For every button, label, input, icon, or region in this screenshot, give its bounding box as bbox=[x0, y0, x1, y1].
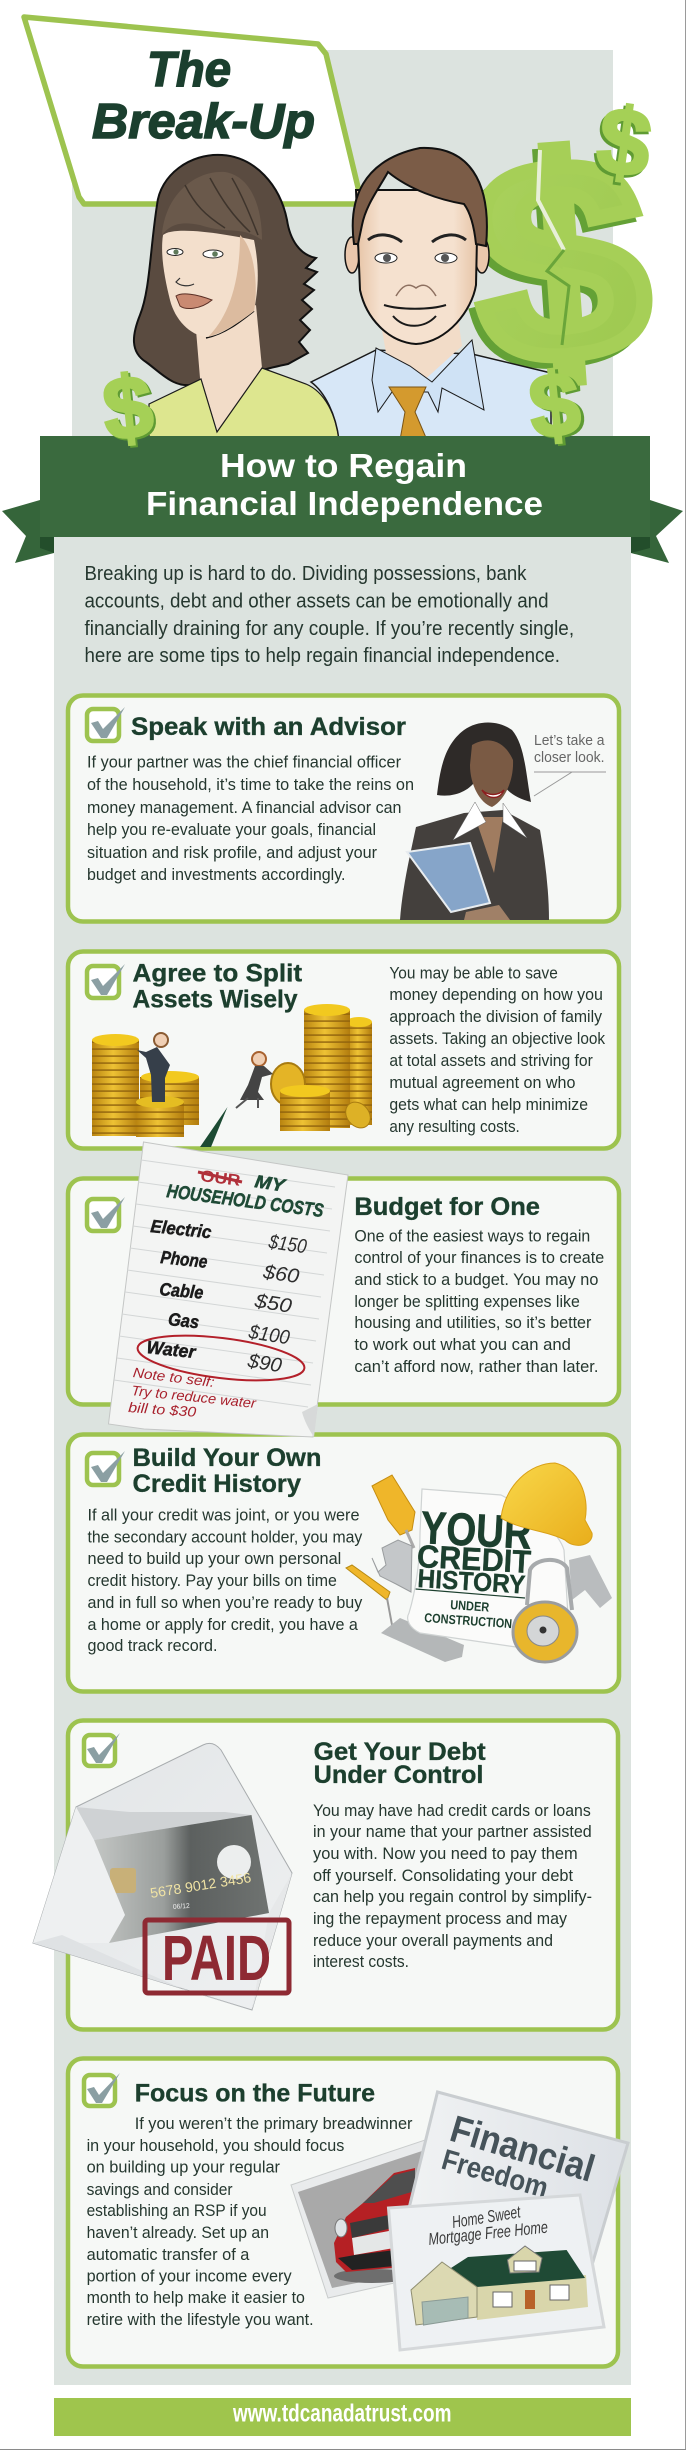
body text: savings and consider bbox=[87, 2180, 233, 2199]
body text bbox=[88, 1506, 363, 1655]
scroll text: CONSTRUCTION bbox=[424, 1610, 513, 1631]
body text: interest costs. bbox=[313, 1952, 409, 1971]
title: The Break-Up: Break-Up bbox=[92, 95, 315, 149]
ears bbox=[345, 237, 489, 273]
background panel: lower bbox=[54, 530, 631, 2385]
heading bbox=[314, 1738, 486, 1789]
body text: reduce your overall payments and bbox=[313, 1931, 553, 1950]
heading bbox=[132, 1444, 322, 1498]
icon: small dollar bottom left: $ bbox=[100, 358, 159, 461]
body text: ing the repayment process and may bbox=[313, 1909, 567, 1928]
neck and chest bbox=[196, 305, 262, 432]
icon: wrench bbox=[372, 1540, 412, 1592]
icon: hard hat bbox=[501, 1463, 592, 1545]
icon: small dollar bottom left: $ bbox=[98, 356, 157, 459]
illustration: coin stacks right with woman bbox=[236, 1004, 375, 1133]
body text: any resulting costs. bbox=[389, 1117, 520, 1136]
body text: control of your finances is to create bbox=[354, 1248, 604, 1267]
icon: checkbox bbox=[87, 1451, 125, 1485]
scroll document bbox=[408, 1489, 569, 1647]
body text: If your partner was the chief financial officer bbox=[87, 753, 401, 772]
body text: situation and risk profile, and adjust your bbox=[87, 843, 377, 862]
body text: can help you regain control by simplify- bbox=[313, 1887, 592, 1906]
body text: a home or apply for credit, you have a bbox=[88, 1615, 358, 1634]
icon: checkbox bbox=[87, 964, 125, 998]
subtitle: Financial Independence bbox=[146, 485, 543, 522]
body text: of the household, it’s time to take the reins on bbox=[87, 775, 414, 794]
icon: padlock bbox=[513, 1560, 577, 1662]
banner fold right bbox=[631, 537, 650, 553]
scroll text: HISTORY bbox=[417, 1563, 526, 1600]
bangs bbox=[162, 172, 262, 240]
note expenses: $50 bbox=[252, 1290, 293, 1318]
panel: speak with an advisor bbox=[68, 696, 619, 922]
intro text: accounts, debt and other assets can be emotionally and bbox=[84, 591, 548, 613]
body text: gets what can help minimize bbox=[389, 1095, 588, 1114]
illustration: man bbox=[311, 148, 551, 440]
illustration: mortgage free home card bbox=[388, 2195, 604, 2350]
body text: money depending on how you bbox=[389, 985, 603, 1004]
tie bbox=[389, 387, 427, 440]
heading: Build Your Own bbox=[132, 1444, 322, 1472]
face bbox=[356, 190, 478, 344]
panel: build your own credit history bbox=[68, 1434, 619, 1692]
intro text: here are some tips to help regain financial independence. bbox=[84, 645, 560, 667]
intro text bbox=[84, 563, 574, 667]
collar bbox=[372, 340, 484, 412]
body text: haven’t already. Set up an bbox=[87, 2223, 269, 2242]
body text: the secondary account holder, you may bbox=[88, 1528, 363, 1547]
illustration: woman bbox=[134, 155, 339, 440]
heading: Under Control bbox=[314, 1761, 483, 1789]
illustration: financial freedom card: Freedom bbox=[438, 2144, 552, 2205]
body text: at total assets and striving for bbox=[389, 1051, 593, 1070]
heading: Assets Wisely bbox=[132, 986, 298, 1014]
body text: money management. A financial advisor can bbox=[87, 798, 402, 817]
illustration: financial freedom card: Financial bbox=[445, 2108, 599, 2191]
scroll text: CREDIT bbox=[416, 1538, 532, 1580]
illustration: budget note paper bbox=[108, 1107, 348, 1437]
body text: If you weren’t the primary breadwinner bbox=[135, 2114, 413, 2133]
hair back bbox=[134, 155, 317, 385]
body text bbox=[87, 753, 414, 884]
icon: screwdriver bbox=[372, 1475, 415, 1548]
handwriting bbox=[427, 2202, 549, 2249]
footer bbox=[54, 2398, 631, 2436]
note heading: HOUSEHOLD COSTS bbox=[165, 1181, 325, 1222]
note heading: MY bbox=[253, 1171, 288, 1196]
note expenses bbox=[146, 1216, 308, 1377]
note heading: OUR bbox=[200, 1168, 242, 1190]
note to self bbox=[128, 1364, 258, 1420]
envelope front bbox=[33, 1807, 125, 1943]
eyes, nose and lips bbox=[167, 248, 223, 308]
scroll text: UNDER bbox=[450, 1597, 490, 1615]
heading bbox=[132, 960, 303, 1014]
callout: closer look. bbox=[534, 749, 604, 766]
banner body bbox=[40, 436, 650, 537]
icon: big cracked dollar sign: $ bbox=[466, 98, 657, 424]
body text: mutual agreement on who bbox=[389, 1073, 575, 1092]
website url: www.tdcanadatrust.com bbox=[232, 2400, 452, 2428]
panel: get your debt under control bbox=[33, 1720, 618, 2030]
body text: If all your credit was joint, or you were bbox=[88, 1506, 360, 1525]
panel: agree to split assets wisely bbox=[68, 952, 619, 1148]
body text: approach the division of family bbox=[389, 1007, 602, 1026]
icon: small dollar top right: $ bbox=[589, 89, 655, 200]
intro text: Breaking up is hard to do. Dividing possessions, bank bbox=[84, 563, 527, 585]
body text: help you re-evaluate your goals, financial bbox=[87, 820, 376, 839]
body text: retire with the lifestyle you want. bbox=[87, 2310, 314, 2329]
scroll text: YOUR bbox=[419, 1501, 533, 1559]
subtitle bbox=[146, 447, 543, 522]
body text: and in full so when you’re ready to buy bbox=[88, 1593, 363, 1612]
note expenses: $90 bbox=[245, 1350, 283, 1377]
callout bbox=[534, 732, 606, 796]
illustration: financial freedom card bbox=[400, 2092, 628, 2265]
icon: small dollar bottom right: $ bbox=[528, 355, 588, 460]
body text: longer be splitting expenses like bbox=[354, 1292, 580, 1311]
house bbox=[411, 2246, 588, 2325]
body text: establishing an RSP if you bbox=[87, 2201, 267, 2220]
blouse bbox=[149, 368, 339, 440]
handwriting: Home Sweet bbox=[451, 2202, 523, 2232]
body text bbox=[87, 2114, 413, 2329]
envelope back bbox=[33, 1743, 292, 2010]
body text: and stick to a budget. You may no bbox=[354, 1270, 598, 1289]
note expenses: $100 bbox=[246, 1321, 291, 1349]
hair bbox=[353, 148, 487, 246]
credit card bbox=[94, 1815, 269, 1943]
heading: Budget for One bbox=[354, 1193, 540, 1221]
body text: credit history. Pay your bills on time bbox=[88, 1571, 337, 1590]
paid stamp: PAID bbox=[162, 1922, 271, 1994]
heading: Credit History bbox=[132, 1470, 301, 1498]
icon: hammer bbox=[569, 1555, 612, 1608]
note expenses: Electric bbox=[150, 1216, 212, 1242]
icon: checkbox bbox=[87, 1197, 125, 1231]
credit card: 5678 9012 3456 bbox=[149, 1869, 252, 1901]
body text: on building up your regular bbox=[87, 2158, 280, 2177]
handwriting: Mortgage Free Home bbox=[427, 2218, 549, 2249]
note heading bbox=[165, 1168, 325, 1222]
note expenses: Cable bbox=[159, 1279, 204, 1303]
body text: housing and utilities, so it’s better bbox=[354, 1313, 592, 1332]
note expenses: Phone bbox=[160, 1247, 208, 1272]
heading: Focus on the Future bbox=[135, 2080, 375, 2108]
icon: big cracked dollar sign: $ bbox=[460, 104, 651, 430]
title box bbox=[24, 17, 362, 204]
icon: checkbox bbox=[84, 1733, 120, 1766]
body text: you with. Now you need to pay them bbox=[313, 1844, 578, 1863]
neck bbox=[382, 318, 462, 384]
body text: month to help make it easier to bbox=[87, 2288, 305, 2307]
body text: good track record. bbox=[88, 1636, 218, 1655]
note expenses: $60 bbox=[261, 1261, 301, 1288]
red circle bbox=[135, 1328, 307, 1388]
subtitle: How to Regain bbox=[220, 447, 467, 484]
body text: in your household, you should focus bbox=[87, 2136, 344, 2155]
note to self: Note to self: bbox=[132, 1364, 216, 1390]
body text bbox=[354, 1227, 604, 1376]
body text: in your name that your partner assisted bbox=[313, 1822, 592, 1841]
body text: One of the easiest ways to regain bbox=[354, 1227, 590, 1246]
body text: need to build up your own personal bbox=[88, 1549, 341, 1568]
panel: focus on the future bbox=[68, 2058, 628, 2366]
body text: to work out what you can and bbox=[354, 1335, 571, 1354]
icon: trowel bbox=[346, 1565, 464, 1662]
note expenses: $150 bbox=[266, 1231, 308, 1258]
title: The Break-Up bbox=[92, 43, 315, 149]
icon: small dollar bottom right: $ bbox=[524, 354, 585, 458]
illustration: car photo bbox=[291, 2140, 430, 2298]
scroll text bbox=[416, 1501, 533, 1631]
intro text: financially draining for any couple. If you’re recently single, bbox=[84, 618, 574, 640]
icon: checkbox bbox=[87, 707, 125, 741]
icon: small dollar top right: $ bbox=[591, 86, 658, 197]
illustration: coin stacks left with man bbox=[92, 1033, 199, 1137]
body text: You may be able to save bbox=[389, 963, 558, 982]
banner fold left bbox=[40, 537, 54, 553]
body text: assets. Taking an objective look bbox=[389, 1029, 606, 1048]
body text: budget and investments accordingly. bbox=[87, 865, 346, 884]
icon: checkbox bbox=[84, 2073, 120, 2106]
credit card: 06/12 bbox=[173, 1903, 190, 1911]
heading: Speak with an Advisor bbox=[131, 713, 406, 741]
note to self: Try to reduce water bbox=[131, 1382, 258, 1411]
callout: Let’s take a bbox=[534, 732, 605, 749]
banner tail left bbox=[2, 500, 54, 563]
note expenses: Gas bbox=[167, 1309, 200, 1332]
eyes bbox=[368, 235, 466, 263]
body text bbox=[313, 1801, 592, 1971]
banner bbox=[2, 436, 683, 563]
body text: can’t afford now, rather than later. bbox=[354, 1357, 598, 1376]
title: The Break-Up: The bbox=[147, 43, 231, 97]
banner tail right bbox=[631, 500, 683, 563]
note to self: bill to $30 bbox=[128, 1399, 197, 1420]
heading: Agree to Split bbox=[132, 960, 303, 988]
body text: You may have had credit cards or loans bbox=[313, 1801, 591, 1820]
background panel: top bbox=[72, 50, 613, 440]
body text bbox=[389, 963, 606, 1136]
illustration: advisor with folder bbox=[400, 722, 549, 920]
body text: portion of your income every bbox=[87, 2267, 292, 2286]
panel: budget for one bbox=[68, 1178, 619, 1404]
illustration: envelope with credit card bbox=[33, 1743, 292, 2010]
shirt bbox=[311, 350, 551, 440]
face bbox=[162, 231, 258, 337]
body text: automatic transfer of a bbox=[87, 2245, 250, 2264]
note expenses: Water bbox=[146, 1337, 197, 1362]
body text: off yourself. Consolidating your debt bbox=[313, 1866, 573, 1885]
heading: Get Your Debt bbox=[314, 1738, 486, 1766]
illustration: credit history under construction bbox=[346, 1463, 612, 1662]
